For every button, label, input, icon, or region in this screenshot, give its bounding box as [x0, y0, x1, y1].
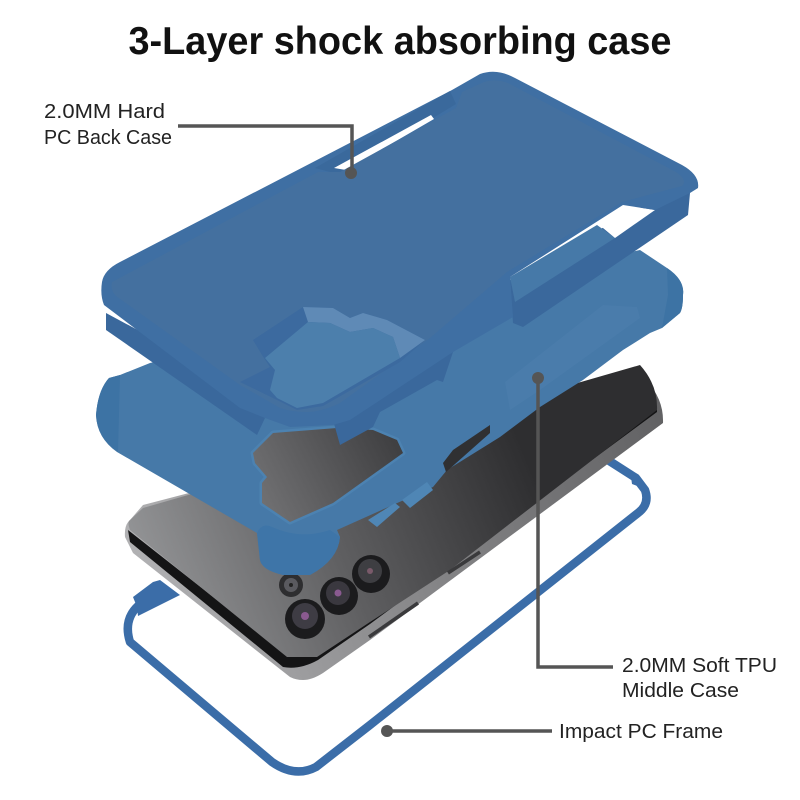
corner bumper right — [662, 268, 683, 328]
title: 3-Layer shock absorbing case — [128, 20, 672, 63]
label: back case: 2.0MM Hard — [44, 101, 165, 123]
camera lenses — [279, 555, 390, 639]
impact PC frame — [128, 455, 646, 771]
left side wall — [106, 313, 265, 435]
label: middle case — [622, 655, 777, 702]
camera cut-out inner — [265, 322, 400, 408]
camera cut-out rim — [240, 307, 425, 410]
label: middle case: 2.0MM Soft TPU — [622, 655, 777, 677]
phone — [125, 365, 663, 680]
side slot — [443, 425, 490, 472]
right side wall — [510, 180, 693, 327]
leader line: back case — [178, 126, 357, 179]
label: frame: Impact PC Frame — [559, 721, 723, 743]
phone side edge — [125, 375, 663, 680]
textured face — [112, 80, 684, 412]
top slot — [315, 91, 456, 172]
phone side buttons — [369, 552, 480, 637]
lower side wall — [333, 352, 453, 445]
middle TPU case — [96, 250, 683, 575]
hard PC back case — [101, 72, 698, 445]
phone black band — [128, 408, 657, 668]
leader line: frame — [381, 725, 552, 737]
label: back case: PC Back Case — [44, 127, 172, 149]
label: back case — [44, 101, 172, 149]
see-through cut-out — [510, 225, 615, 302]
label: middle case: Middle Case — [622, 680, 739, 702]
leader line: middle case — [532, 372, 613, 667]
corner bumper bottom — [257, 525, 340, 575]
camera cut-out highlight — [303, 307, 425, 358]
side buttons — [368, 482, 433, 527]
right white slot — [597, 205, 655, 238]
camera opening ring — [253, 428, 403, 522]
raised panel — [505, 305, 640, 410]
camera opening — [253, 428, 403, 522]
phone back glass — [128, 365, 657, 657]
top surface rim — [101, 72, 698, 427]
corner bumper left — [96, 375, 120, 452]
